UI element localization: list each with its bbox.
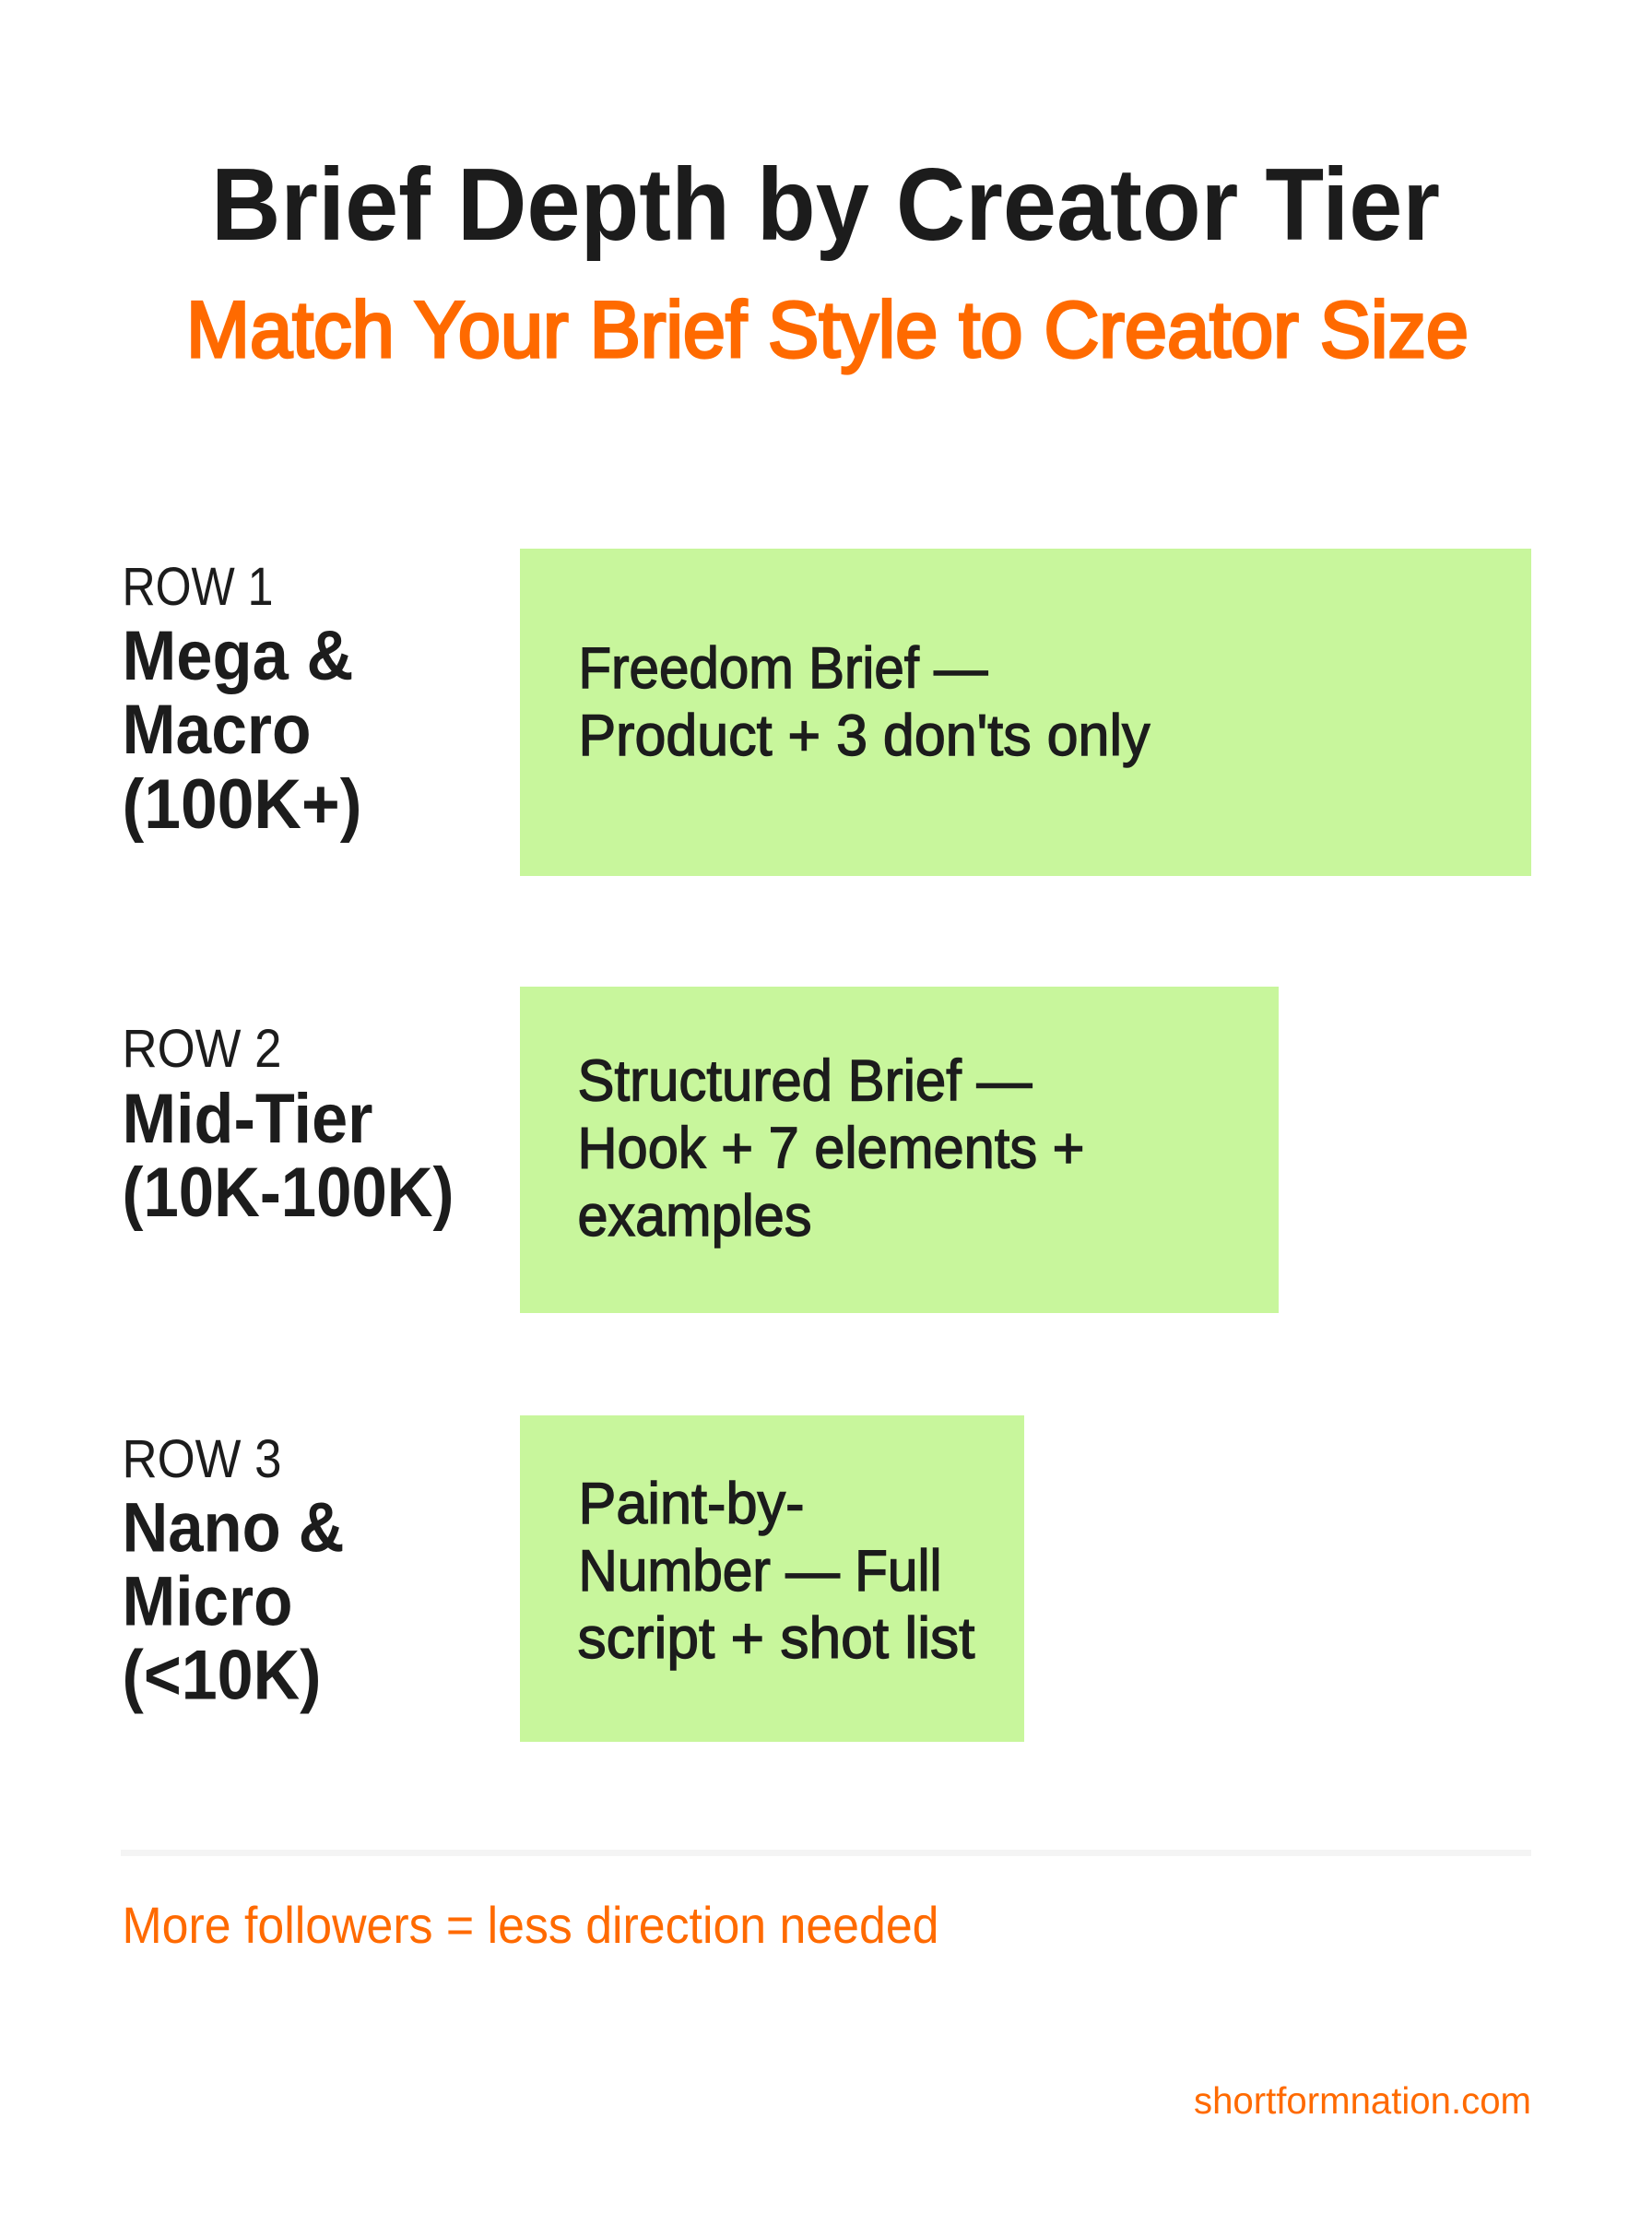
row 3 number: ROW 3 (122, 1429, 282, 1489)
row 2 tier label (122, 1080, 454, 1232)
row 3 green bar (520, 1415, 1024, 1742)
row 1 tier label: (100K+) (122, 765, 361, 844)
row 2 green bar (520, 987, 1279, 1313)
row 1 tier label: Mega & (122, 617, 354, 695)
subtitle: Match Your Brief Style to Creator Size (186, 286, 1469, 374)
row 3 bar text: script + shot list (577, 1606, 975, 1671)
row 2 number: ROW 2 (122, 1019, 282, 1079)
row 3 tier label: Nano & (122, 1488, 345, 1568)
row 3 bar text (577, 1472, 975, 1671)
row 2 bar text: Hook + 7 elements + (577, 1116, 1084, 1180)
row 3 bar text: Paint-by- (579, 1472, 804, 1536)
row 1 bar text: Freedom Brief — (579, 636, 988, 701)
row 2 bar text (577, 1049, 1084, 1249)
row 1 number: ROW 1 (122, 557, 273, 617)
panel: row 3 (122, 1415, 1024, 1742)
row 3 tier label: Micro (122, 1562, 293, 1641)
takeaway note: More followers = less direction needed (122, 1896, 938, 1954)
row 3 tier label: (<10K) (122, 1636, 321, 1715)
panel: row 2 (122, 987, 1279, 1313)
row 3 bar text: Number — Full (579, 1539, 942, 1604)
row 2 tier label: (10K-100K) (122, 1154, 454, 1232)
row 2 tier label: Mid-Tier (122, 1080, 372, 1158)
row 1 bar text (579, 636, 1150, 768)
source url: shortformnation.com (1194, 2079, 1531, 2122)
row 1 green bar (520, 549, 1531, 876)
row 1 tier label (122, 617, 361, 844)
panel: row 1 (122, 549, 1531, 876)
row 1 bar text: Product + 3 don'ts only (579, 704, 1150, 768)
row 3 tier label (122, 1488, 345, 1715)
row 2 bar text: Structured Brief — (577, 1049, 1032, 1114)
row 2 bar text: examples (577, 1184, 811, 1249)
title: Brief Depth by Creator Tier (211, 148, 1440, 262)
row 1 tier label: Macro (122, 691, 312, 769)
